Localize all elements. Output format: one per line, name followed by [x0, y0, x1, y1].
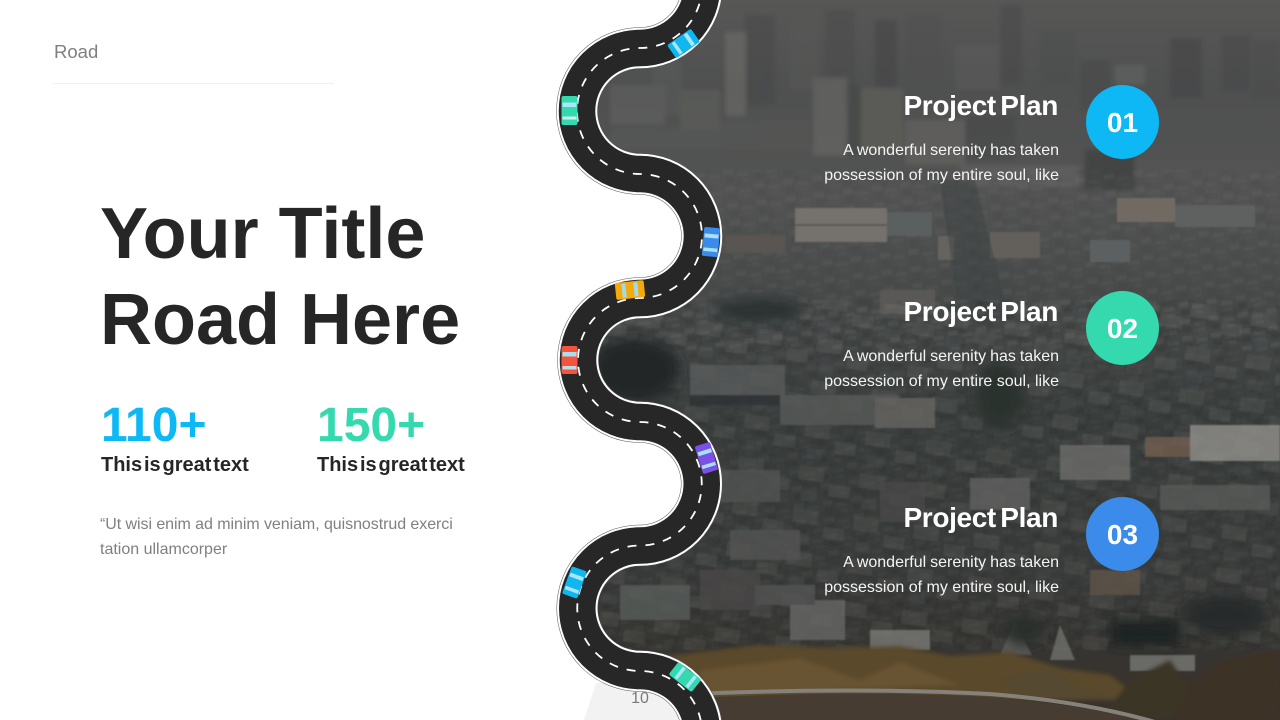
item 01 text: possession of my entire soul, like	[824, 167, 1059, 184]
item 01 badge	[1086, 85, 1159, 159]
item 03 badge	[1086, 497, 1159, 571]
item 03 text	[824, 554, 1059, 596]
stat: 110+: 110+	[101, 399, 206, 452]
main title: Your Title	[100, 194, 425, 274]
roadway	[690, 694, 1165, 720]
item 01 heading: Project Plan	[903, 90, 1058, 121]
winding road	[577, 0, 702, 720]
section label: Road	[54, 41, 98, 62]
road and city photo scene	[556, 0, 1280, 720]
item 03 text: possession of my entire soul, like	[824, 579, 1059, 596]
item 02 text: possession of my entire soul, like	[824, 373, 1059, 390]
grey corner shape	[584, 683, 690, 720]
item 01 text: A wonderful serenity has taken	[843, 142, 1059, 159]
quote text	[100, 516, 453, 558]
quote text: tation ullamcorper	[100, 541, 227, 558]
car: purple	[695, 442, 718, 474]
hillside grass	[668, 643, 1278, 702]
page number: 10	[631, 690, 649, 707]
car: yellow	[615, 280, 645, 300]
lower city blocks	[600, 300, 1280, 650]
car: blue	[702, 227, 720, 257]
stat: 150+: 150+	[317, 399, 425, 452]
item 02 heading: Project Plan	[903, 296, 1058, 327]
item 03 heading: Project Plan	[903, 502, 1058, 533]
item 02 text	[824, 348, 1059, 390]
stat: 110+	[101, 399, 249, 476]
item 03 badge: 03	[1107, 519, 1138, 550]
item 02 badge	[1086, 291, 1159, 365]
dark tree masses	[590, 298, 1265, 646]
stat: 150+	[317, 399, 465, 476]
main title	[100, 194, 460, 360]
car: green	[562, 96, 578, 125]
quote text: “Ut wisi enim ad minim veniam, quisnostrud exerci	[100, 516, 453, 533]
item 01 text	[824, 142, 1059, 184]
item 03 text: A wonderful serenity has taken	[843, 554, 1059, 571]
item 02 text: A wonderful serenity has taken	[843, 348, 1059, 365]
car: green bottom	[669, 662, 701, 692]
stat: 150+: This is great text	[317, 454, 465, 476]
car: cyan top	[667, 29, 700, 58]
item 01 badge: 01	[1107, 107, 1138, 138]
mid city blocks	[725, 180, 1256, 314]
item 02 badge: 02	[1107, 313, 1138, 344]
guard rail	[690, 690, 1165, 720]
stat: 110+: This is great text	[101, 454, 249, 476]
city photo	[540, 0, 1280, 720]
car: cyan lower	[562, 566, 587, 599]
main title: Road Here	[100, 280, 460, 360]
car: red	[562, 346, 578, 374]
